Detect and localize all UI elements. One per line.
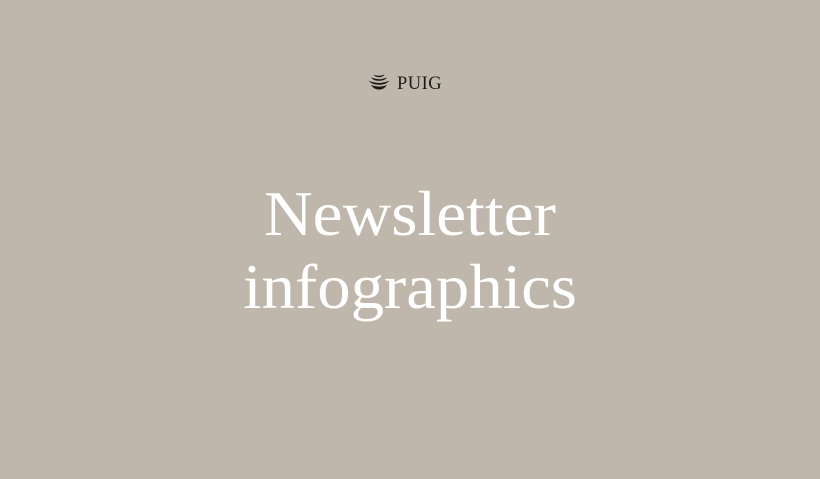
logo <box>368 74 442 94</box>
brand name: PUIG <box>397 74 442 94</box>
title line 2: infographics <box>243 252 577 322</box>
icon: Puig logo mark <box>368 74 390 90</box>
title line 1: Newsletter <box>264 179 556 249</box>
title <box>243 179 577 322</box>
